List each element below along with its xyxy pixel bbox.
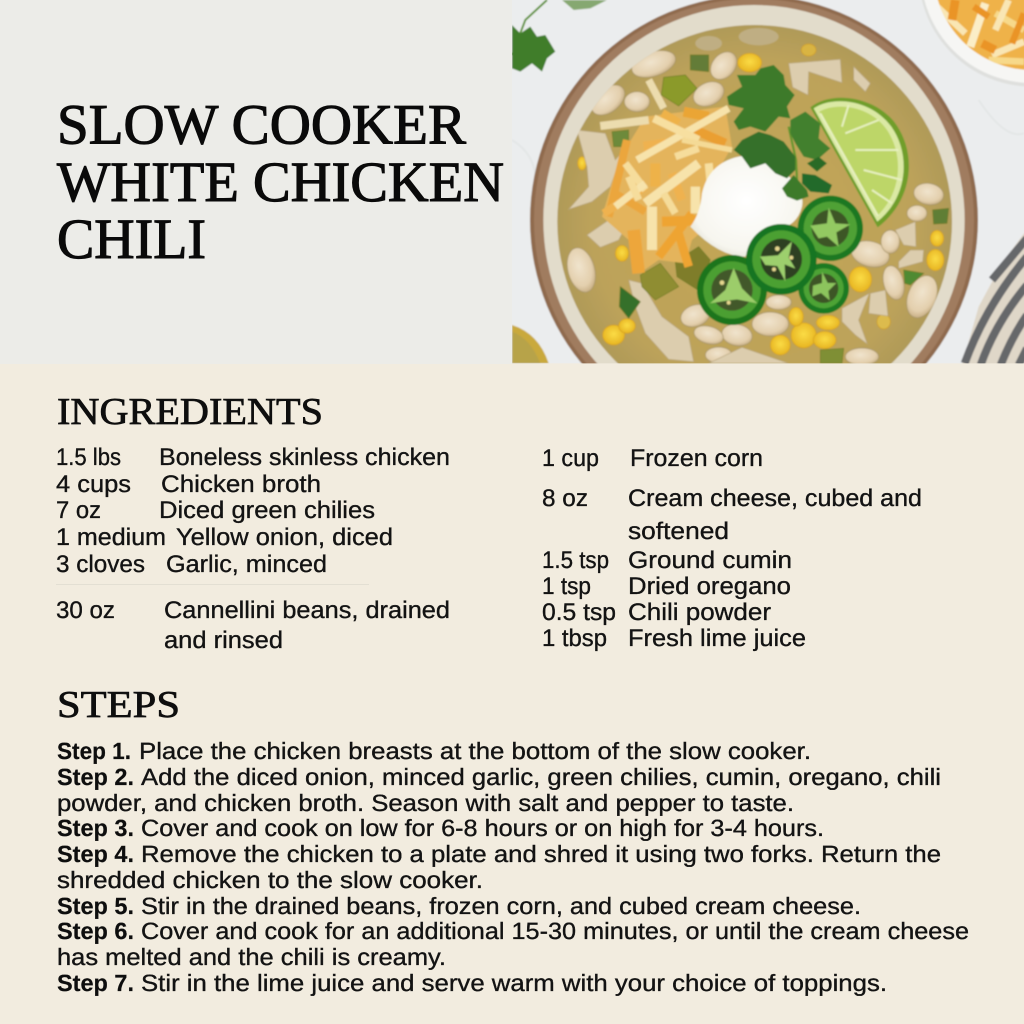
steps list: has melted and the chili is creamy. [57,944,446,970]
steps list: Step 5. [57,893,134,919]
title: CHILI [57,208,206,271]
ingredients list: right column: Cream cheese, cubed and [628,485,922,512]
ingredients list: right column: Frozen corn [630,445,763,472]
icon: shredded chicken [569,59,924,363]
title [57,94,504,271]
steps list: shredded chicken to the slow cooker. [57,867,483,893]
ingredients list: left column: 3 cloves [56,551,145,578]
icon: lime wedge [810,98,909,227]
steps list [57,738,969,996]
icon: small bowl of shredded cheese [919,0,1024,87]
ingredients list: left column: and rinsed [164,627,283,654]
ingredients list: left column [56,444,450,654]
icon: jalapeno slices [697,196,863,325]
icon: shredded cheese [600,80,732,273]
ingredients list: left column: Cannellini beans, drained [164,597,450,624]
icon: cilantro sprig on table [512,0,607,72]
icon: corn kernels [578,44,944,355]
steps list: Step 7. [57,970,134,996]
ingredients list: right column: 1 cup [542,445,599,472]
ingredients list: right column: Fresh lime juice [628,625,806,652]
steps list: Step 4. [57,841,134,867]
steps heading: STEPS [57,684,180,726]
ingredients list: right column: 0.5 tsp [542,599,616,626]
icon: diced green chilies [612,55,949,363]
ingredients list: right column: 1 tbsp [542,625,607,652]
title: SLOW COOKER [57,94,466,156]
title: WHITE CHICKEN [57,151,504,214]
ingredients list: left column: 7 oz [56,497,101,524]
steps list: Step 3. [57,815,134,841]
steps list: Stir in the lime juice and serve warm with your choice of toppings. [141,970,887,996]
icon: white beans [563,28,945,365]
panel: title background [0,0,512,364]
ingredients list: left column: 30 oz [56,597,115,624]
steps list: Add the diced onion, minced garlic, green chilies, cumin, oregano, chili [141,764,941,790]
steps list: Remove the chicken to a plate and shred it using two forks. Return the [141,841,941,867]
ingredients list: left column: Chicken broth [161,471,321,498]
icon: bowl rim [529,0,979,364]
photo: bowl of white chicken chili [512,0,1024,364]
steps list: Step 1. [57,738,131,764]
steps list: Stir in the drained beans, frozen corn, and cubed cream cheese. [141,893,861,919]
ingredients list: left column: Garlic, minced [166,551,327,578]
icon: cilantro garnish [727,65,832,201]
ingredients list: right column: 1.5 tsp [542,547,609,574]
steps list: Step 6. [57,918,134,944]
ingredients heading: INGREDIENTS [57,391,323,433]
ingredients list: left column: 1 medium [56,524,166,551]
ingredients list: left column: Boneless skinless chicken [159,444,450,471]
icon: lime wedge bottom left [512,325,549,363]
ingredients list: left column: 4 cups [56,471,131,498]
ingredients list: right column: softened [628,518,729,545]
ingredients list: left column: Yellow onion, diced [176,524,393,551]
ingredients list: right column: 1 tsp [542,573,591,600]
ingredients list: right column [542,445,922,652]
steps list: Cover and cook on low for 6-8 hours or on high for 3-4 hours. [141,815,824,841]
icon: sour cream [690,155,802,257]
steps list: Place the chicken breasts at the bottom of the slow cooker. [139,738,811,764]
ingredients list: right column: Dried oregano [628,573,791,600]
ingredients list: left column: 1.5 lbs [56,444,121,471]
panel: ingredients and steps background [0,364,1024,1024]
ingredients list: left column: Diced green chilies [159,497,375,524]
steps list: Step 2. [57,764,134,790]
ingredients list: right column: Chili powder [628,599,771,626]
steps list: powder, and chicken broth. Season with salt and pepper to taste. [57,790,794,816]
steps list: Cover and cook for an additional 15-30 minutes, or until the cream cheese [141,918,969,944]
icon: striped towel [962,233,1024,365]
ingredients list: right column: 8 oz [542,485,588,512]
ingredients list: right column: Ground cumin [628,547,792,574]
